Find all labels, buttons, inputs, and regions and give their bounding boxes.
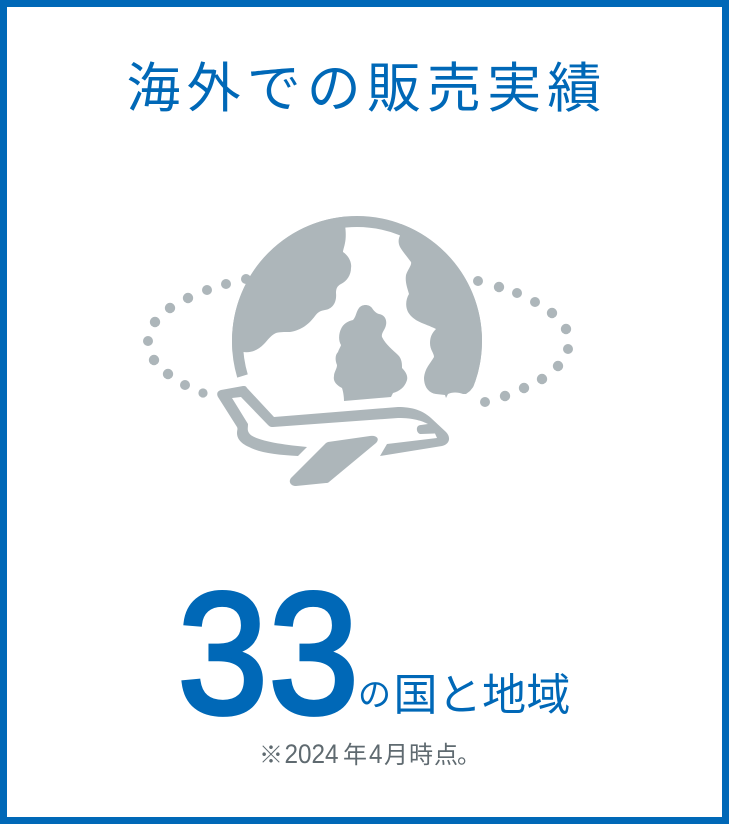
footnote text: 月時点。	[384, 742, 481, 769]
unit label	[358, 671, 571, 720]
footnote	[259, 740, 481, 769]
footnote mark: ※	[259, 742, 283, 769]
icon: orbit dots left	[143, 274, 251, 398]
big number 33: 33	[178, 556, 360, 750]
icon: globe with plane and orbit	[143, 205, 573, 486]
globe outline ring	[237, 222, 477, 380]
left continent	[232, 216, 352, 352]
particle の: の	[358, 676, 391, 713]
icon: orbit dots right	[473, 276, 573, 407]
footnote year: 2024	[284, 740, 339, 769]
footnote text: year kanji: 年	[343, 742, 367, 769]
title: 海外での販売実績	[126, 59, 607, 119]
footnote month number: 4	[369, 740, 383, 769]
icon: airplane body outline	[217, 386, 449, 456]
centre continent	[334, 305, 407, 401]
icon: globe	[232, 216, 482, 401]
label: 国と地域: 国と地域	[394, 671, 571, 720]
right continent	[398, 224, 482, 398]
icon: airplane wing	[290, 436, 378, 486]
